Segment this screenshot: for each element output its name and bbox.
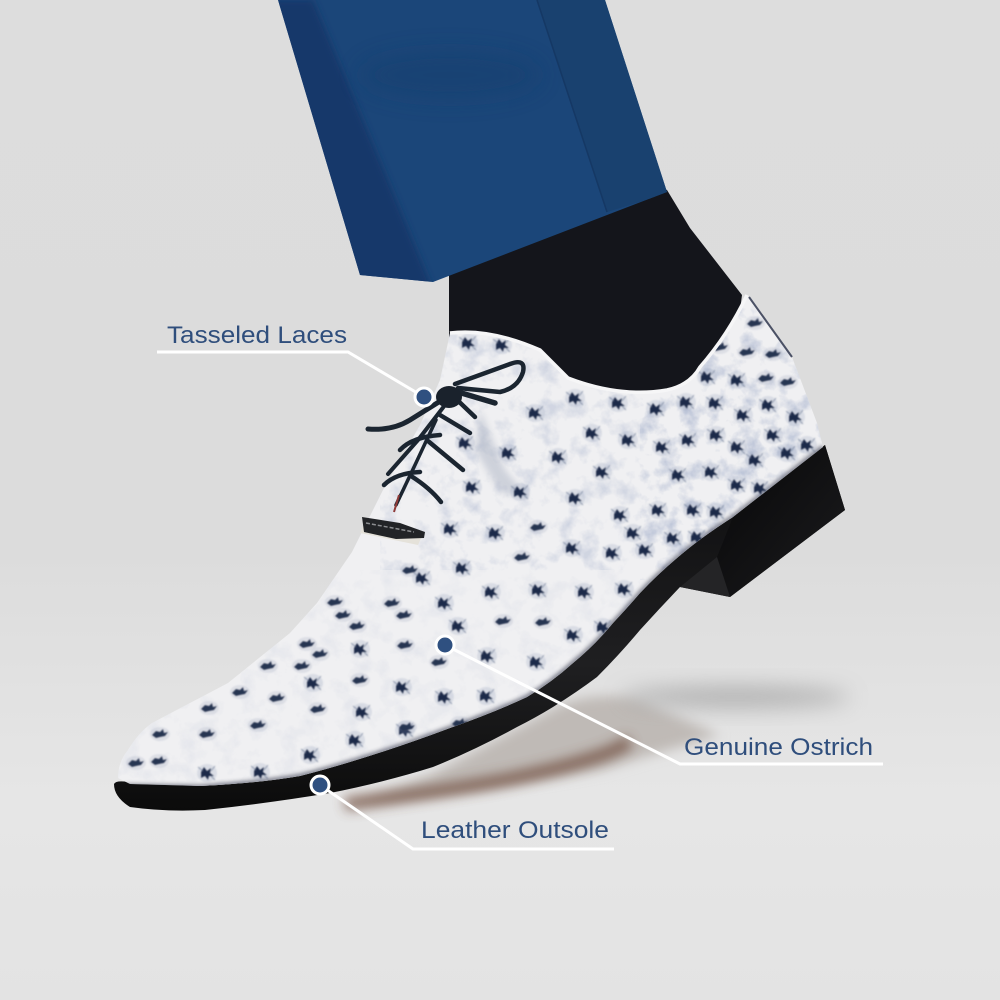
laces xyxy=(368,362,523,505)
red thread on lacing xyxy=(394,495,399,512)
callout: tasseled laces: Tasseled Laces xyxy=(167,322,347,349)
callout: leather outsole: Leather Outsole xyxy=(421,817,609,844)
infographic stage xyxy=(114,0,883,850)
shoe sole and heel xyxy=(114,445,845,811)
sock xyxy=(449,180,742,400)
callout: tasseled laces xyxy=(157,322,433,406)
leather mottling xyxy=(110,300,830,790)
floor shadow xyxy=(345,686,850,806)
trouser leg xyxy=(270,0,672,290)
callout: genuine ostrich xyxy=(436,636,883,764)
sole edge shading xyxy=(125,447,823,787)
heel seam xyxy=(749,297,792,357)
callout: leather outsole xyxy=(311,776,614,849)
callout: genuine ostrich: Genuine Ostrich xyxy=(684,734,873,761)
eyestay shading xyxy=(474,414,522,496)
shoe upper in white ostrich leather xyxy=(110,295,830,790)
ostrich quill spots xyxy=(126,316,817,782)
metal lace tassel xyxy=(360,517,425,545)
collar binding xyxy=(450,295,747,392)
